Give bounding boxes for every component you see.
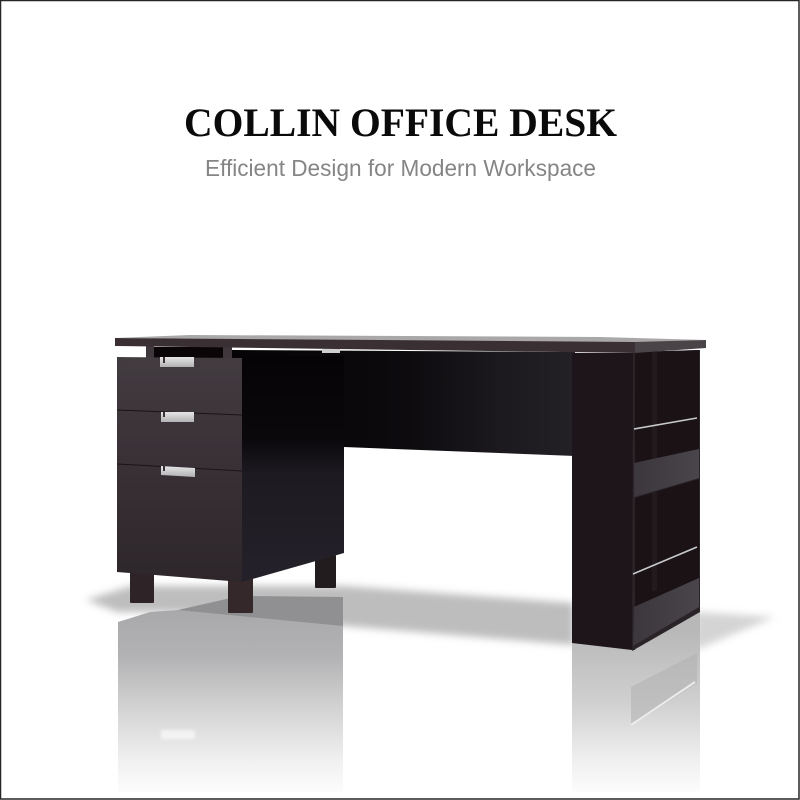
- desktop: [115, 335, 706, 353]
- back leg: [315, 555, 336, 588]
- right leg panel: [572, 353, 635, 650]
- handle: bottom drawer: [161, 466, 195, 477]
- subtitle: Efficient Design for Modern Workspace: [205, 155, 596, 181]
- floor shadow and reflection: [86, 586, 775, 792]
- handle: top drawer: [160, 357, 194, 367]
- middle leg: [228, 578, 253, 613]
- lower rail: [633, 547, 697, 574]
- shelf unit: [632, 350, 700, 651]
- handle: middle drawer: [161, 412, 194, 422]
- cabinet side: [240, 356, 344, 582]
- reflected shelf highlight: [631, 682, 695, 725]
- modesty panel: [232, 350, 575, 456]
- lower panel: [633, 578, 699, 646]
- left reflection: [118, 596, 343, 792]
- darker cabinet shadow: [178, 596, 343, 626]
- upper panel: [634, 449, 699, 497]
- floor shadow: [86, 586, 775, 650]
- lower compartment: [635, 479, 699, 607]
- left front leg: [130, 570, 154, 603]
- reflected shelf panel: [631, 653, 697, 726]
- lower post: [652, 491, 657, 592]
- under-top gap: [146, 346, 232, 358]
- desk: [115, 335, 706, 651]
- underside handle: [322, 349, 340, 353]
- upper compartment: [635, 350, 699, 463]
- cabinet front: [117, 357, 242, 582]
- drawer seams: [117, 410, 242, 471]
- upper rail: [634, 418, 697, 429]
- title: COLLIN OFFICE DESK: [184, 100, 617, 145]
- right reflection: [572, 600, 700, 792]
- shelf back: [632, 350, 700, 651]
- upper post: [652, 352, 657, 459]
- reflected drawer handle: [161, 730, 195, 739]
